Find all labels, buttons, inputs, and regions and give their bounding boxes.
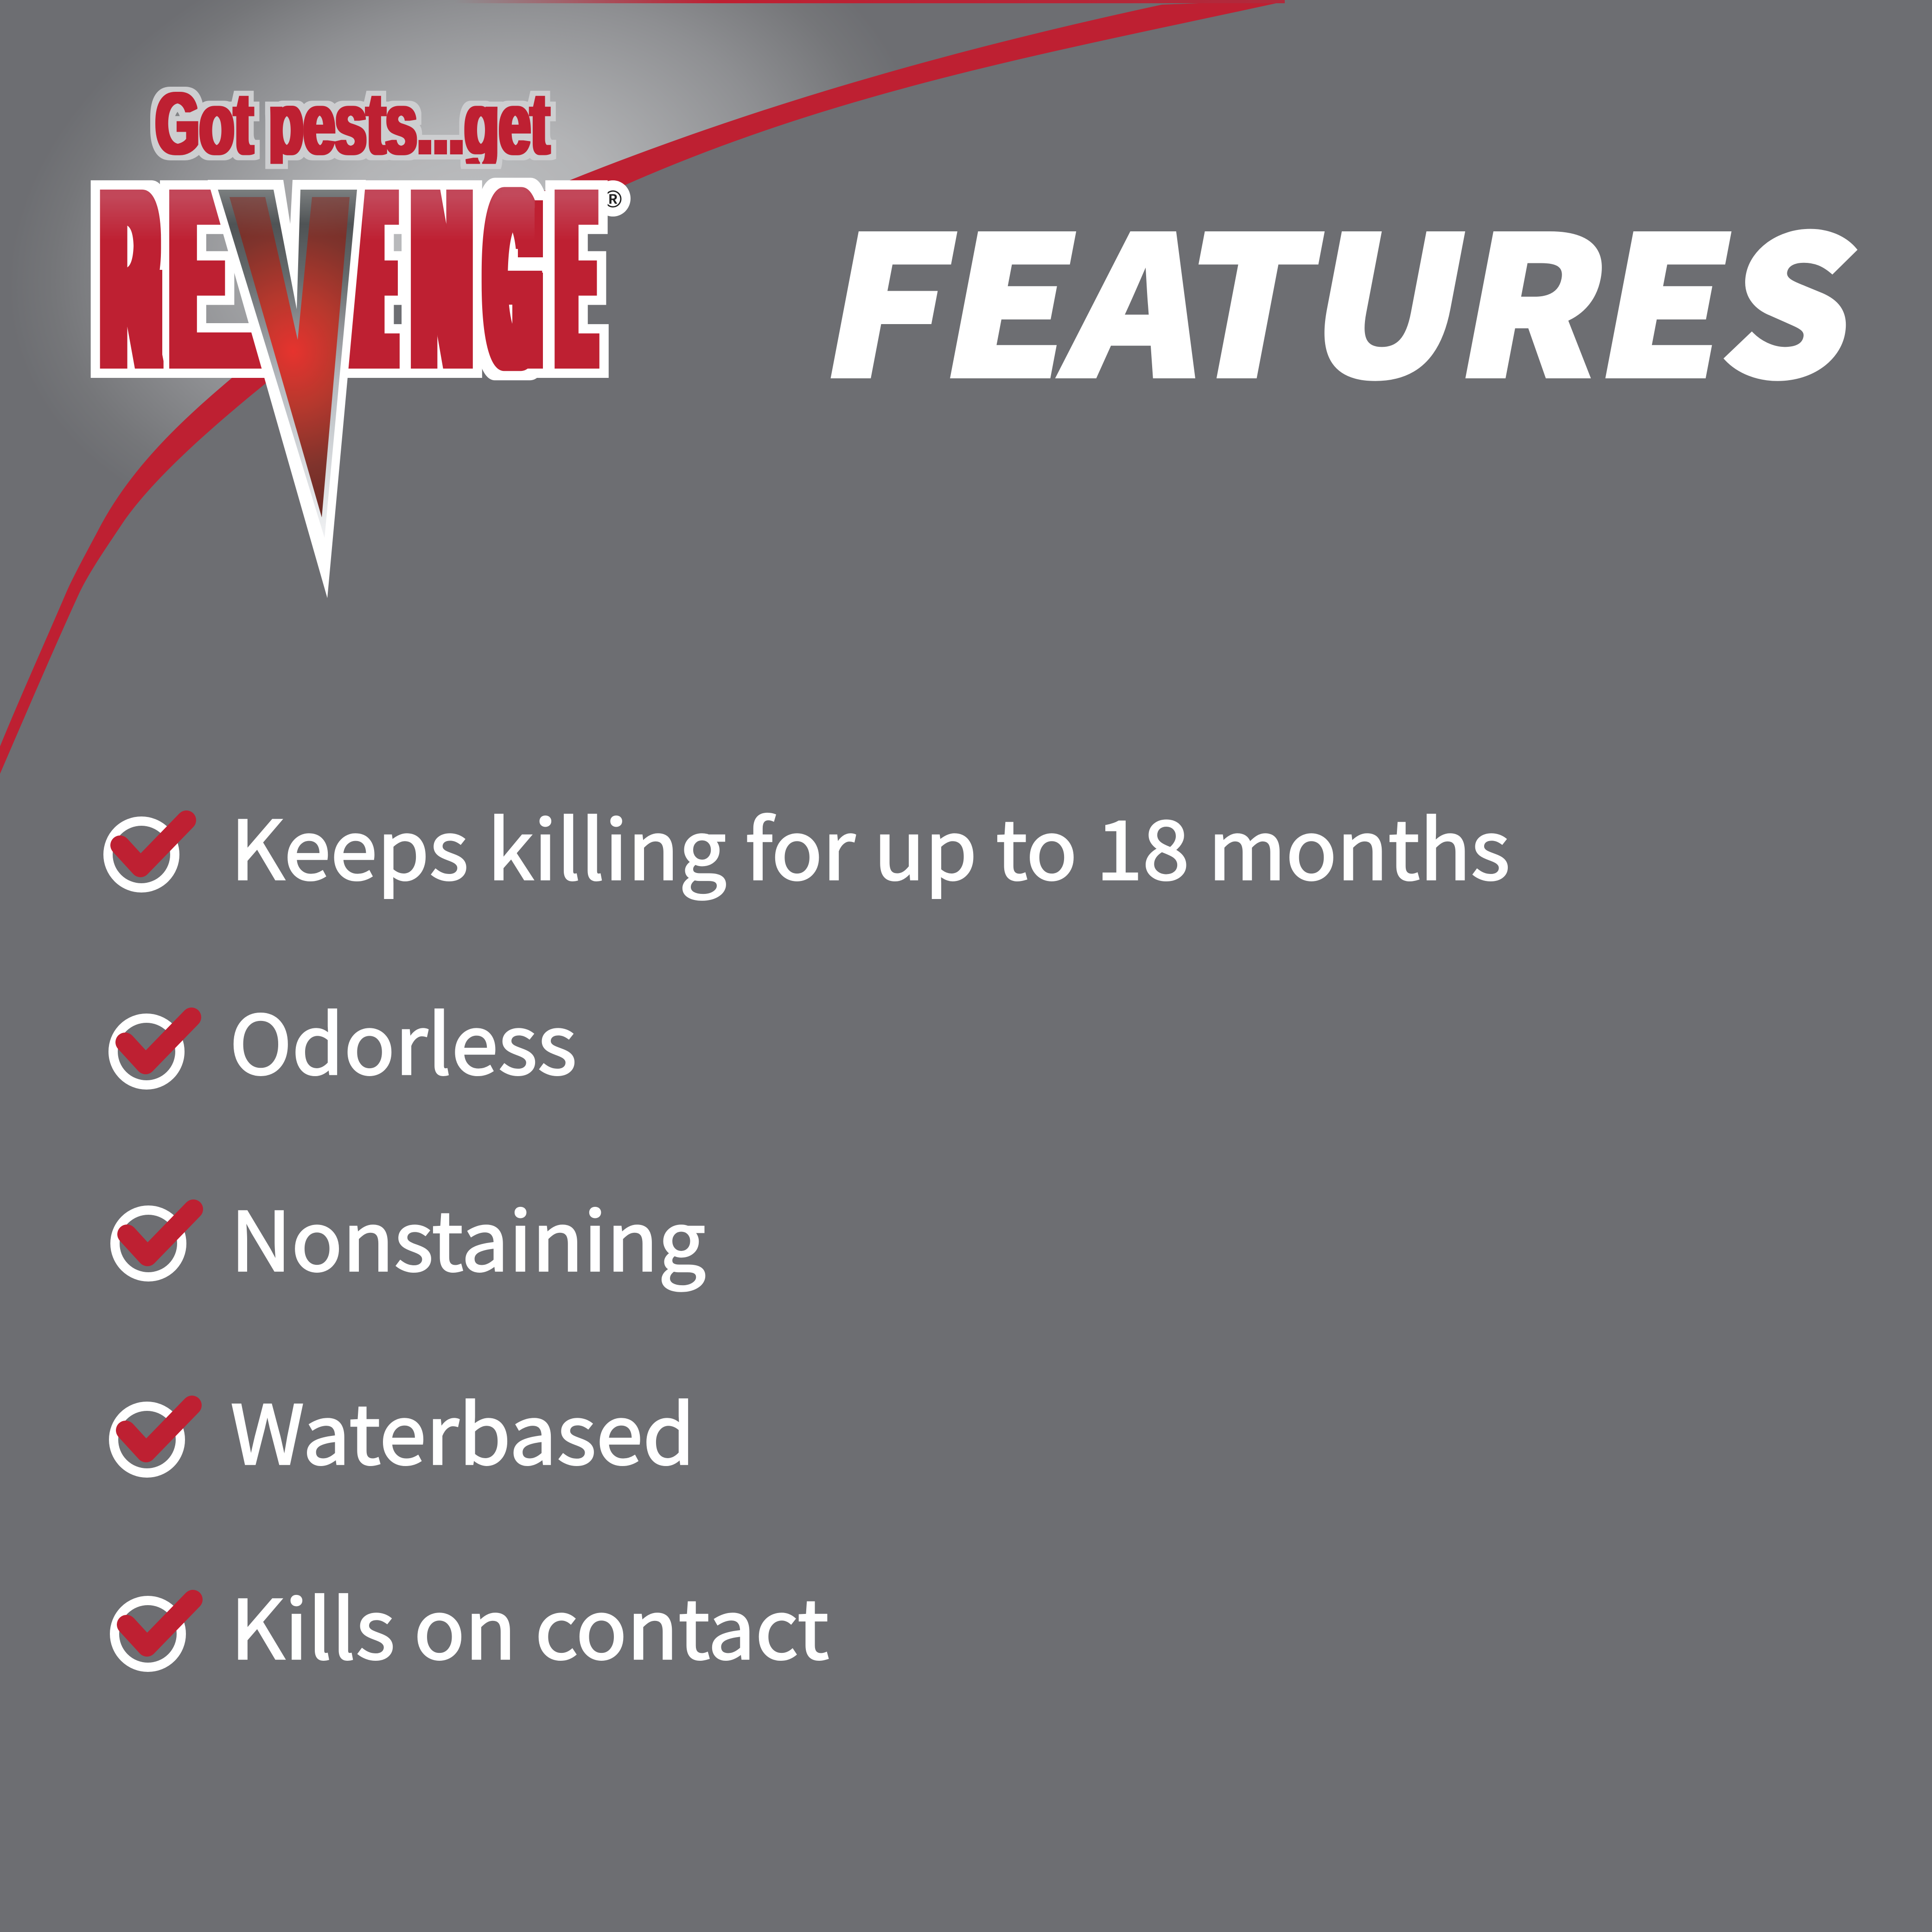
logo letters [103, 140, 593, 418]
logo letters: E [172, 140, 223, 418]
feature 4 [114, 1370, 695, 1488]
logo registered mark [595, 180, 631, 217]
feature 1 [108, 785, 1510, 903]
logo letters: N [414, 140, 470, 418]
thin red line along top edge [454, 0, 1285, 3]
logo letters: E [369, 140, 393, 418]
feature list [108, 785, 1510, 1683]
icon: check circle [108, 820, 186, 888]
logo letters: R [103, 140, 157, 418]
feature text: Waterbased [230, 1370, 695, 1488]
feature 5 [115, 1564, 829, 1683]
logo letters: G [487, 140, 538, 418]
light glow behind logo [0, 0, 1162, 746]
icon: check circle [115, 1209, 193, 1277]
feature text: Kills on contact [230, 1564, 829, 1683]
icon: check circle [113, 1017, 191, 1085]
feature 3 [115, 1176, 706, 1294]
text: E [560, 140, 593, 418]
icon: check circle [115, 1600, 193, 1667]
feature text: Nonstaining [230, 1176, 706, 1294]
logo V emblem: V [230, 124, 351, 500]
logo tagline: Got pests...get [155, 75, 549, 172]
red swoosh [0, 0, 1285, 774]
logo registered mark: ® [604, 186, 622, 213]
title: FEATURES [806, 154, 1884, 431]
icon: check circle [114, 1405, 192, 1473]
feature text: Keeps killing for up to 18 months [230, 785, 1510, 903]
logo [103, 75, 631, 598]
feature text: Odorless [230, 980, 577, 1098]
logo V emblem [208, 180, 366, 598]
feature 2 [113, 980, 577, 1098]
